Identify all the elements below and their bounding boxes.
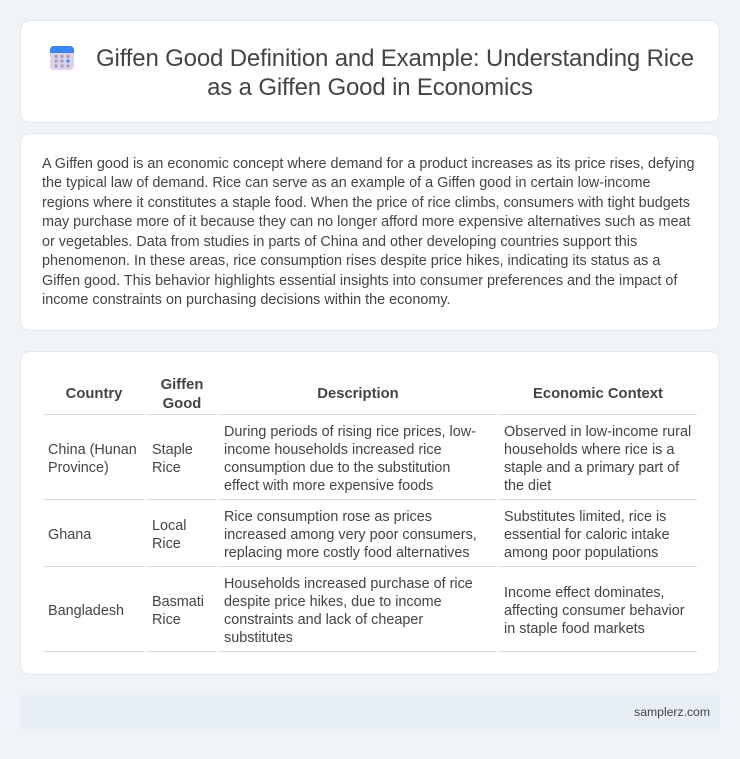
text block: definition paragraph: A Giffen good is an economic concept where demand for a product increases as its price rises, defying xyxy=(42,156,694,172)
table row: Bangladesh: Basmati xyxy=(152,594,204,610)
table row: Bangladesh xyxy=(48,576,685,646)
table row: Ghana: among poor populations xyxy=(504,545,658,561)
table row: Ghana: Rice consumption rose as prices xyxy=(224,509,432,525)
table row: Ghana: increased among very poor consumers, xyxy=(224,527,477,543)
table row: Bangladesh: Rice xyxy=(152,612,181,628)
table row: China: households where rice is a xyxy=(504,442,674,458)
table row: Ghana: Rice xyxy=(152,536,181,552)
text block: definition paragraph: or vegetables. Data from studies in parts of China and other developing countries support this xyxy=(42,234,637,250)
footer bar xyxy=(20,695,720,729)
table row: Bangladesh: despite price hikes, due to income xyxy=(224,594,442,610)
table row: China: income households increased rice xyxy=(224,442,442,458)
text block: definition paragraph: phenomenon. In these areas, rice consumption rises despite price hikes, indicating its status as a xyxy=(42,253,660,269)
table header: Country xyxy=(66,386,122,402)
text block: definition paragraph: Giffen good. This behavior highlights essential insights into consumer preferences and the impact of xyxy=(42,273,677,289)
table row: China: Rice xyxy=(152,460,181,476)
footer text: samplerz.com xyxy=(634,705,710,719)
text block: definition paragraph xyxy=(42,156,694,308)
table row: Ghana: essential for caloric intake xyxy=(504,527,670,543)
table row: Ghana: Ghana xyxy=(48,527,91,543)
table row: Ghana: replacing more costly food alternatives xyxy=(224,545,470,561)
table header: Economic Context xyxy=(533,386,663,402)
panel: table card xyxy=(20,351,720,675)
table row: China: China (Hunan xyxy=(48,442,137,458)
table row: Ghana: Local xyxy=(152,518,186,534)
table row: Bangladesh: Income effect dominates, xyxy=(504,585,665,601)
text block: definition paragraph: may purchase more of it because they can no longer afford more expensive alternatives such as meat xyxy=(42,214,690,230)
table row: Bangladesh: in staple food markets xyxy=(504,621,645,637)
title xyxy=(96,45,694,101)
title: Giffen Good Definition and Example: Understanding Rice xyxy=(96,45,694,72)
table row: China: During periods of rising rice prices, low- xyxy=(224,424,476,440)
table row: Ghana xyxy=(48,509,670,561)
table header: Description xyxy=(317,386,399,402)
table row: Ghana: Substitutes limited, rice is xyxy=(504,509,666,525)
text block: definition paragraph: the typical law of demand. Rice can serve as an example of a Giffen good in certain low-income xyxy=(42,175,650,191)
text block: definition paragraph: income constraints on purchasing decisions within the economy. xyxy=(42,292,450,308)
table row: China xyxy=(48,424,691,494)
table: Giffen good examples xyxy=(43,377,697,652)
table row: China: effect with more expensive foods xyxy=(224,478,433,494)
table row: China: Observed in low-income rural xyxy=(504,424,691,440)
table header: Giffen xyxy=(161,377,203,393)
table row: China: the diet xyxy=(504,478,551,494)
table row: Bangladesh: Households increased purchase of rice xyxy=(224,576,473,592)
table row: China: Staple xyxy=(152,442,193,458)
table header: Good xyxy=(163,396,201,412)
table row: China: Province) xyxy=(48,460,109,476)
panel: title card xyxy=(20,20,720,123)
table header xyxy=(66,377,663,412)
table row: Bangladesh: Bangladesh xyxy=(48,603,124,619)
icon: calendar xyxy=(50,46,74,70)
title: as a Giffen Good in Economics xyxy=(207,74,533,101)
table row: Bangladesh: substitutes xyxy=(224,630,293,646)
table row: Bangladesh: constraints and lack of cheaper xyxy=(224,612,423,628)
text block: definition paragraph: regions where it constitutes a staple food. When the price of rice climbs, consumers with tight budgets xyxy=(42,195,690,211)
table row: China: staple and a primary part of xyxy=(504,460,679,476)
table row: Bangladesh: affecting consumer behavior xyxy=(504,603,685,619)
table row: China: consumption due to the substitution xyxy=(224,460,450,476)
panel: definition text xyxy=(20,133,720,331)
